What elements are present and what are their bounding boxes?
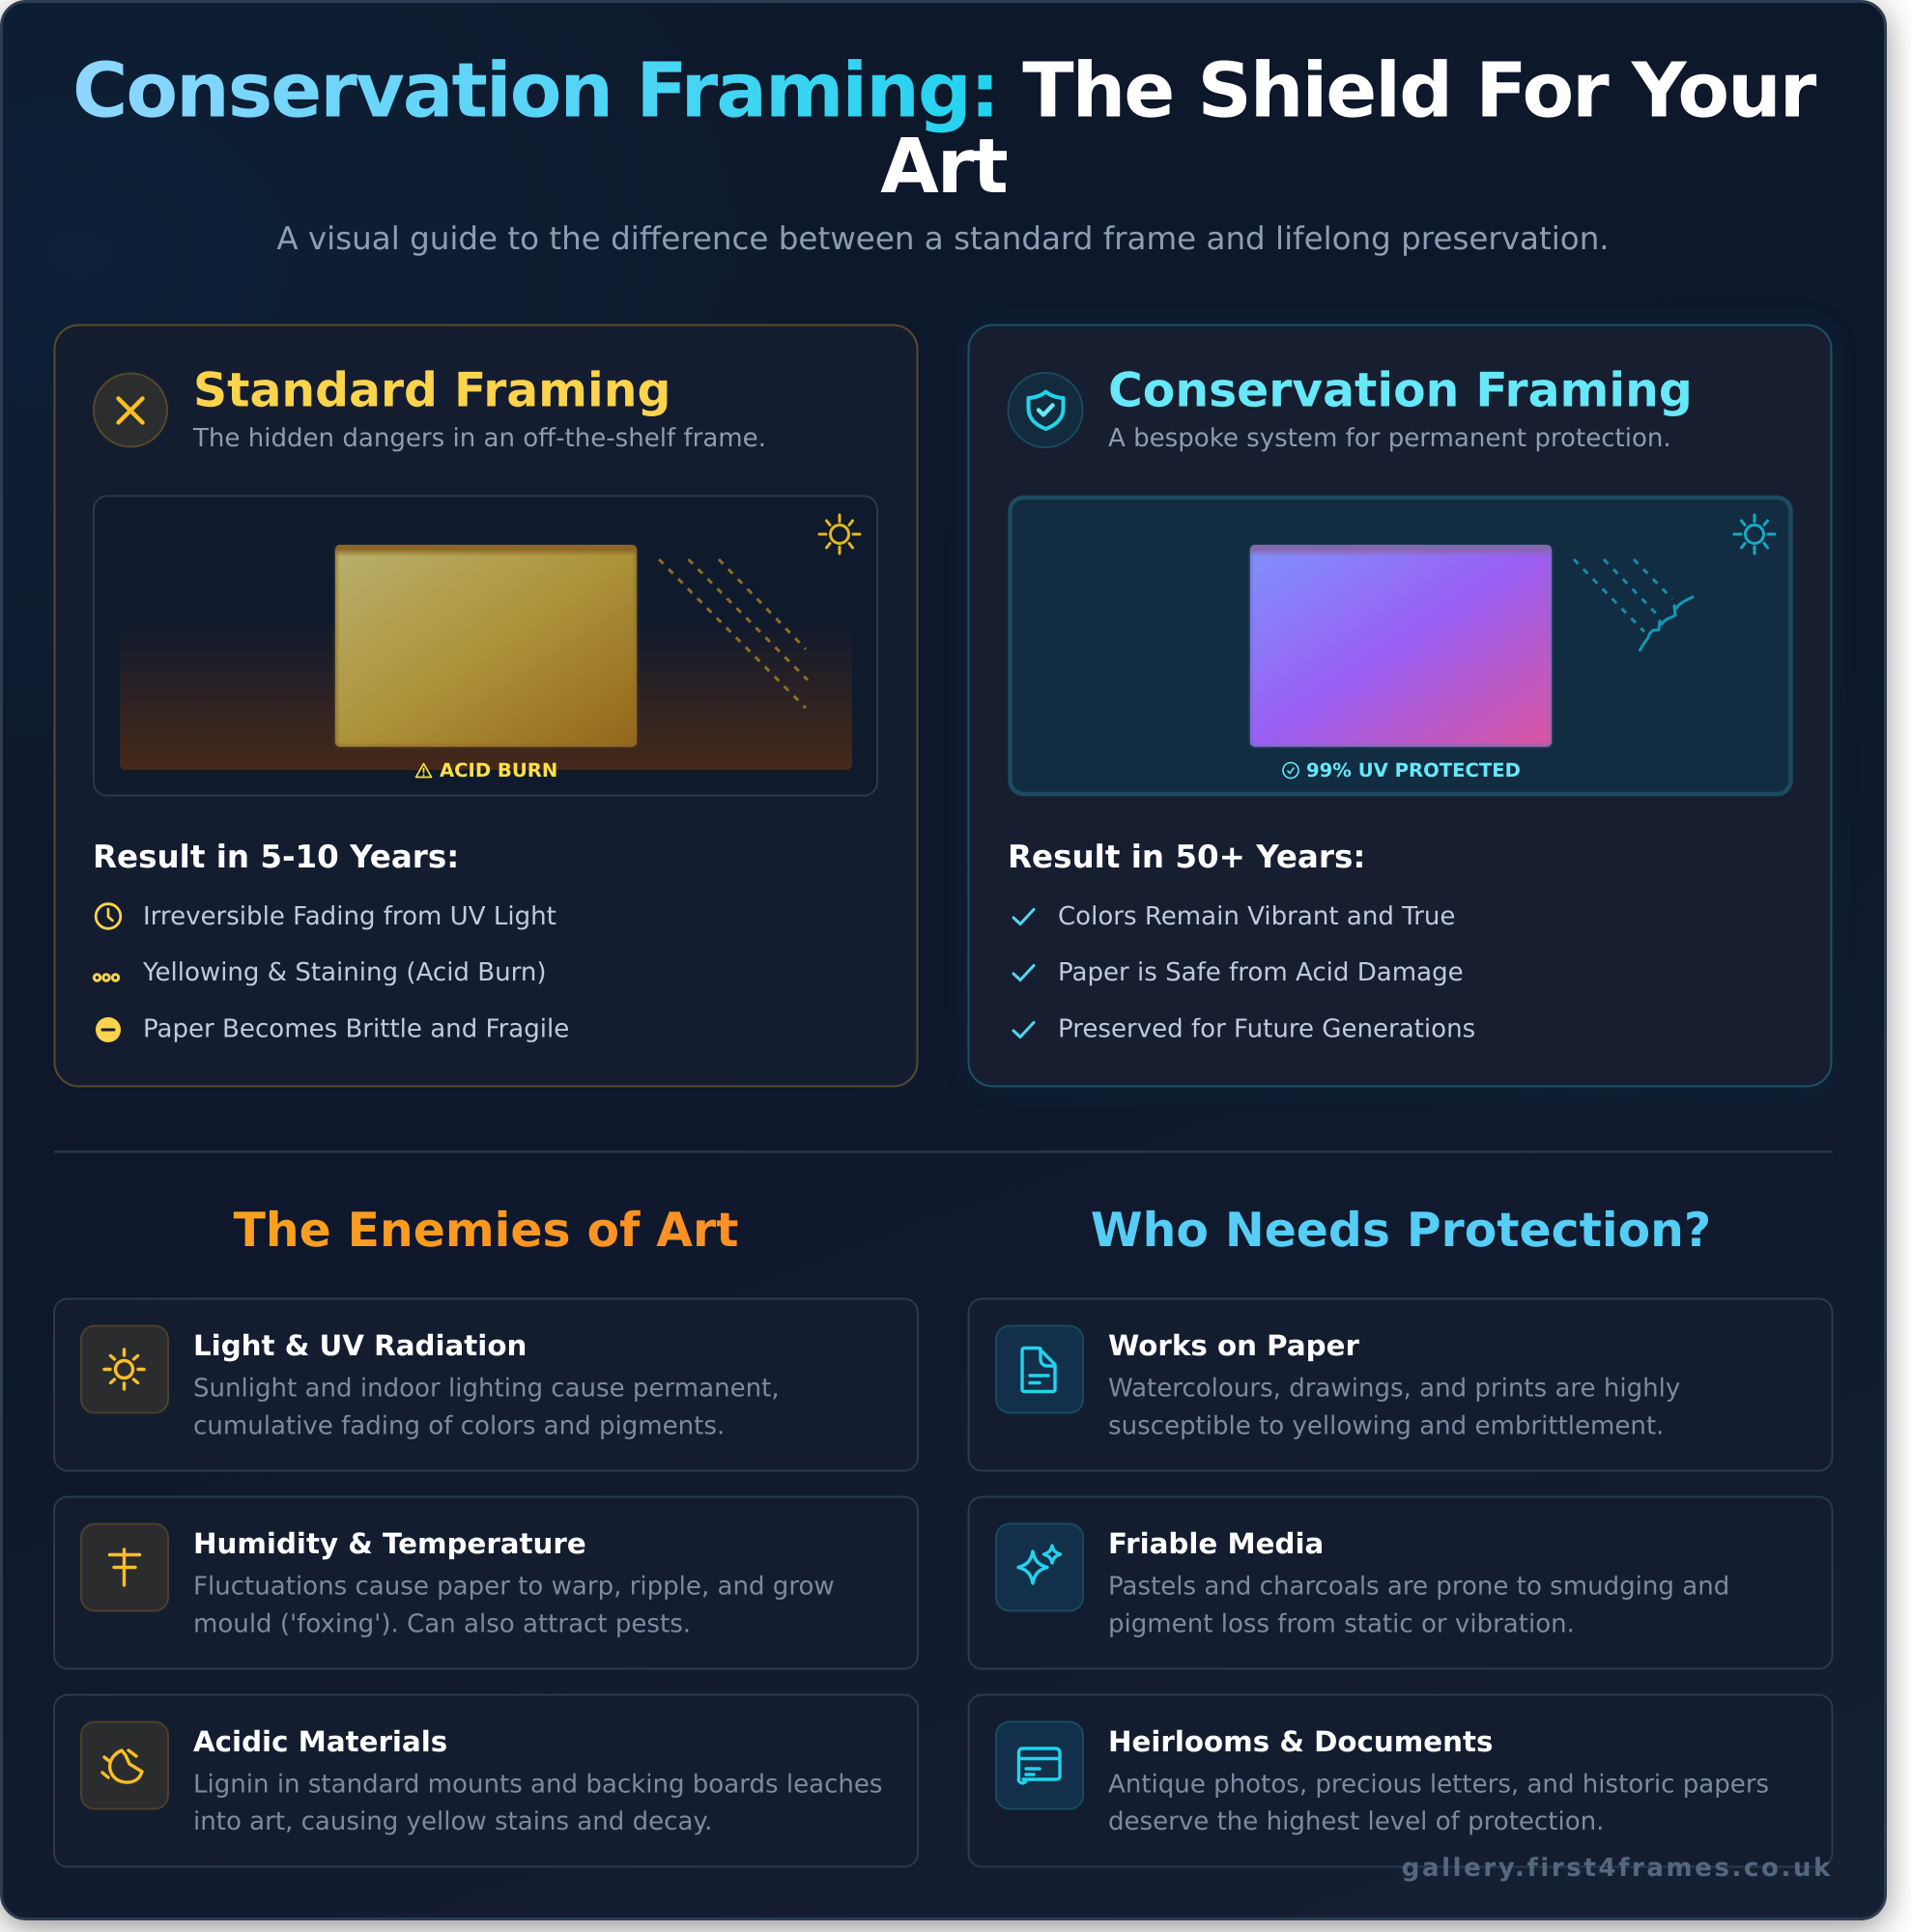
subheading: A bespoke system for permanent protection. [1108, 424, 1671, 453]
description: Antique photos, precious letters, and historic papers [1108, 1770, 1769, 1799]
card: works on paper [968, 1298, 1832, 1470]
artwork: vibrant [1250, 545, 1552, 747]
watermark: gallery.first4frames.co.uk [1402, 1854, 1833, 1883]
card: heirlooms and documents [968, 1694, 1832, 1866]
title: Light & UV Radiation [193, 1329, 527, 1362]
description: cumulative fading of colors and pigments. [193, 1412, 725, 1441]
description [193, 1573, 835, 1638]
icon: minus circle [96, 1017, 121, 1042]
title: Art [880, 123, 1007, 211]
label: acid burn: ACID BURN [440, 759, 557, 781]
title: Humidity & Temperature [193, 1527, 586, 1560]
list: conservation framing results [1013, 902, 1475, 1043]
subheading: The hidden dangers in an off-the-shelf frame. [192, 424, 766, 453]
description: pigment loss from static or vibration. [1108, 1609, 1575, 1638]
description: into art, causing yellow stains and decay. [193, 1807, 712, 1836]
label: uv protected: 99% UV PROTECTED [1306, 759, 1521, 781]
description [1108, 1770, 1769, 1836]
title [72, 47, 1817, 211]
description [1108, 1573, 1729, 1638]
item: preserved: Preserved for Future Generations [1058, 1014, 1475, 1043]
item: colors: Colors Remain Vibrant and True [1058, 902, 1455, 931]
icon: shield [1009, 373, 1082, 447]
description: Watercolours, drawings, and prints are highly [1108, 1374, 1680, 1403]
heading: result 50+: Result in 50+ Years: [1008, 838, 1365, 875]
heading: who needs protection: Who Needs Protection? [1091, 1203, 1711, 1258]
icon: dots [94, 975, 119, 980]
icon: humidity [81, 1524, 168, 1611]
heading: result 5-10: Result in 5-10 Years: [93, 838, 459, 875]
item: paper: Paper is Safe from Acid Damage [1058, 958, 1464, 987]
item: brittle: Paper Becomes Brittle and Fragile [143, 1014, 569, 1043]
artwork: yellowed [335, 545, 637, 747]
icon: check [1013, 1022, 1034, 1037]
uv rays blocked [1574, 559, 1672, 632]
icon: sun [819, 515, 860, 554]
description: Lignin in standard mounts and backing boards leaches [193, 1770, 883, 1799]
acid burn gradient [120, 618, 852, 770]
icon: check [1013, 910, 1034, 923]
description: Fluctuations cause paper to warp, ripple, and grow [193, 1573, 835, 1602]
icon: sparkles [996, 1524, 1083, 1611]
heading: standard framing: Standard Framing [193, 363, 670, 417]
title: Conservation Framing: The Shield For Your [72, 47, 1817, 135]
icon: document [996, 1325, 1083, 1412]
panel: standard framing [54, 325, 918, 1086]
item: yellowing: Yellowing & Staining (Acid Burn) [142, 958, 547, 987]
icon: clock [96, 904, 121, 928]
icon: sun [81, 1325, 168, 1412]
description [193, 1374, 780, 1441]
uv shield line [1640, 597, 1693, 650]
heading: conservation framing: Conservation Framing [1108, 363, 1693, 417]
title: Friable Media [1108, 1527, 1324, 1560]
list: standard framing results [94, 902, 569, 1043]
item: fading: Irreversible Fading from UV Light [143, 902, 556, 931]
panel: conservation framing [968, 325, 1832, 1086]
uv rays [659, 559, 808, 708]
description: deserve the highest level of protection. [1108, 1807, 1604, 1836]
icon: x in circle [94, 373, 167, 446]
icon: scroll [996, 1721, 1083, 1808]
title: Heirlooms & Documents [1108, 1725, 1493, 1758]
card: acidic materials [54, 1694, 918, 1866]
description: Sunlight and indoor lighting cause permanent, [193, 1374, 780, 1403]
diagram: protected frame [1011, 497, 1791, 794]
title: Acidic Materials [193, 1725, 447, 1758]
icon: acid [81, 1721, 168, 1808]
subtitle: A visual guide to the difference between a standard frame and lifelong preservation. [276, 220, 1610, 257]
card: humidity and temperature [54, 1497, 918, 1669]
title: Works on Paper [1108, 1329, 1359, 1362]
card: friable media [968, 1497, 1832, 1669]
description [193, 1770, 883, 1836]
icon: sun [1734, 515, 1775, 554]
icon: check [1013, 966, 1034, 980]
card: light and uv [54, 1298, 918, 1470]
heading: enemies of art: The Enemies of Art [234, 1203, 738, 1258]
description: susceptible to yellowing and embrittlement. [1108, 1412, 1664, 1441]
diagram: acid burn frame [94, 497, 877, 796]
description: Pastels and charcoals are prone to smudging and [1108, 1573, 1729, 1602]
description: mould ('foxing'). Can also attract pests. [193, 1609, 691, 1638]
description [1108, 1374, 1680, 1441]
